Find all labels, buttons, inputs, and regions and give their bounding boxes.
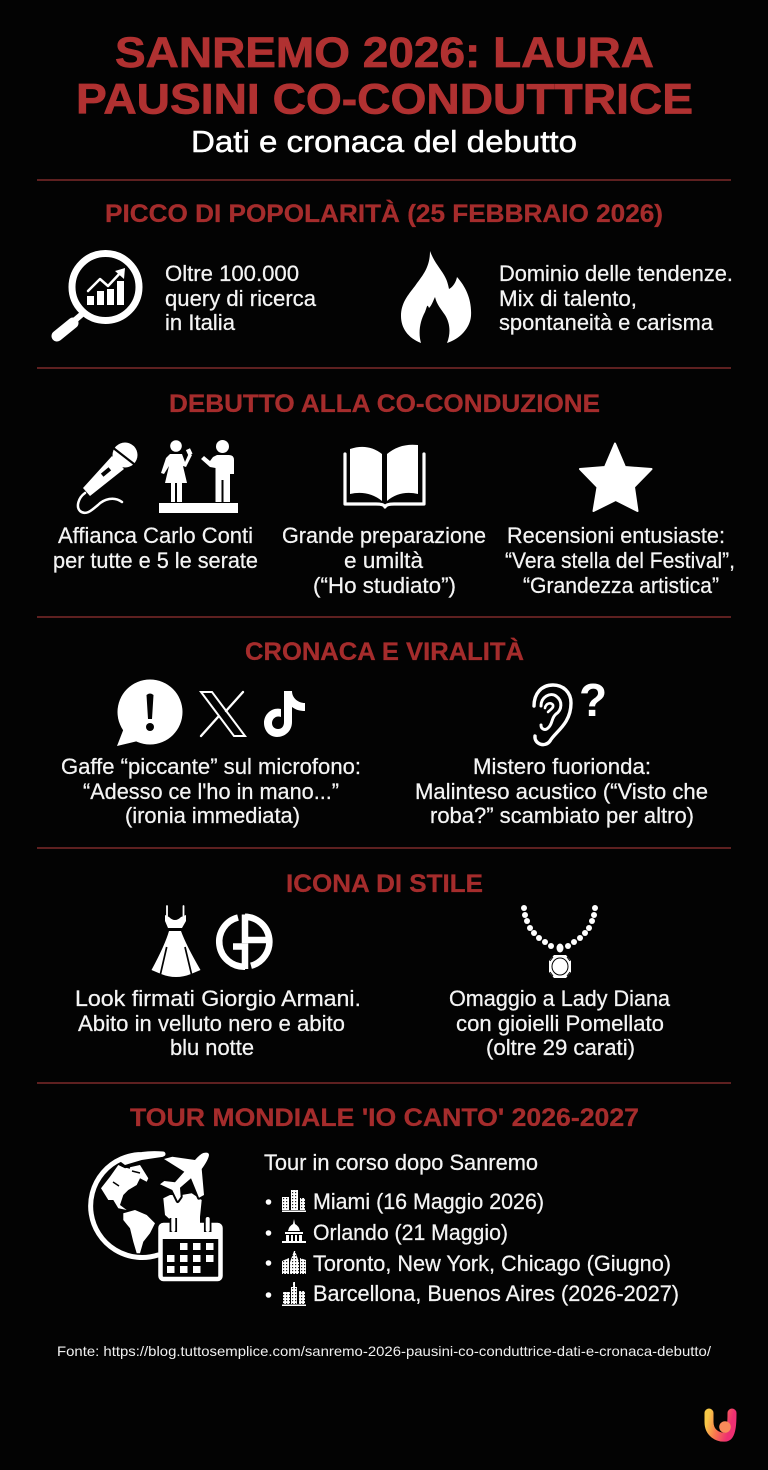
- icon: pearl necklace with pendant: [521, 905, 598, 978]
- text: dominio delle tendenze: [499, 261, 733, 335]
- item: orlando: Orlando (21 Maggio): [313, 1220, 508, 1245]
- icon: open book: [345, 445, 424, 507]
- title: SANREMO 2026: LAURA: [115, 30, 654, 77]
- item: barcellona, buenos aires: Barcellona, Buenos Aires (2026-2027): [313, 1281, 679, 1306]
- text: gaffe: Gaffe “piccante” sul microfono:: [61, 754, 361, 779]
- heading: cronaca: CRONACA E VIRALITÀ: [245, 637, 524, 666]
- list: tour dates: [266, 1189, 679, 1306]
- text: tour in corso: Tour in corso dopo Sanremo: [264, 1150, 538, 1175]
- text: dominio delle tendenze: spontaneità e carisma: [499, 310, 714, 335]
- heading: debutto: DEBUTTO ALLA CO-CONDUZIONE: [169, 390, 600, 418]
- icon: speech bubble with exclamation mark: [117, 680, 182, 746]
- icon: ear with question mark: ?: [579, 674, 607, 726]
- text: query di ricerca: Oltre 100.000: [165, 261, 299, 286]
- text: mistero fuorionda: [415, 754, 708, 828]
- text: mistero fuorionda: roba?” scambiato per altro): [430, 803, 694, 828]
- panel: tour mondiale: [91, 1104, 679, 1306]
- icon: microphone: [78, 442, 138, 513]
- icon: Giorgio Armani logo: [219, 914, 271, 969]
- text: gaffe: [61, 754, 361, 828]
- text: grande preparazione: Grande preparazione: [282, 523, 486, 548]
- icon: brand logo: [709, 1413, 732, 1437]
- text: look armani: Look firmati Giorgio Armani.: [75, 986, 361, 1011]
- icon: X logo: [201, 692, 245, 736]
- icon: flame: [401, 251, 471, 343]
- icon: star: [580, 444, 652, 511]
- text: query di ricerca: query di ricerca: [165, 286, 317, 311]
- text: recensioni: Recensioni entusiaste:: [507, 523, 725, 548]
- text: grande preparazione: (“Ho studiato”): [313, 573, 456, 598]
- icon: dress: [152, 906, 200, 977]
- text: omaggio a lady diana: Omaggio a Lady Diana: [449, 986, 671, 1011]
- text: look armani: blu notte: [170, 1035, 254, 1060]
- text: mistero fuorionda: Mistero fuorionda:: [473, 754, 651, 779]
- item: miami: Miami (16 Maggio 2026): [313, 1189, 544, 1214]
- text: query di ricerca: [165, 261, 317, 335]
- icon: ear with question mark: [534, 674, 607, 745]
- text: omaggio a lady diana: con gioielli Pomellato: [456, 1011, 664, 1036]
- text: gaffe: (ironia immediata): [125, 803, 300, 828]
- subtitle: Dati e cronaca del debutto: [191, 124, 577, 159]
- text: recensioni: [505, 523, 735, 598]
- text: query di ricerca: in Italia: [165, 310, 236, 335]
- panel: cronaca e viralità: [61, 637, 708, 828]
- title: [76, 30, 693, 124]
- title: PAUSINI CO-CONDUTTRICE: [76, 76, 693, 124]
- text: look armani: [75, 986, 361, 1060]
- icon: two presenters on stage: [159, 440, 238, 513]
- item: toronto, new york, chicago: Toronto, New York, Chicago (Giugno): [313, 1251, 671, 1276]
- icon: globe, plane and calendar: [91, 1152, 221, 1279]
- text: recensioni: “Grandezza artistica”: [523, 573, 719, 598]
- heading: picco di popolarità: PICCO DI POPOLARITÀ (25 FEBBRAIO 2026): [105, 199, 663, 228]
- panel: icona di stile: [75, 870, 671, 1060]
- heading: tour: TOUR MONDIALE 'IO CANTO' 2026-2027: [130, 1104, 639, 1132]
- text: affianca carlo conti: [53, 523, 258, 573]
- text: omaggio a lady diana: (oltre 29 carati): [486, 1035, 635, 1060]
- text: look armani: Abito in velluto nero e abito: [78, 1011, 345, 1036]
- text: dominio delle tendenze: Mix di talento,: [499, 286, 637, 311]
- text: mistero fuorionda: Malinteso acustico (“Visto che: [415, 779, 708, 804]
- panel: debutto alla co-conduzione: [53, 390, 735, 598]
- text: dominio delle tendenze: Dominio delle tendenze.: [499, 261, 733, 286]
- icon: TikTok logo: [264, 691, 305, 737]
- icon: magnifying glass with chart: [57, 254, 139, 336]
- source line: Fonte: https://blog.tuttosemplice.com/sanremo-2026-pausini-co-conduttrice-dati-e-cronaca-debutto/: [57, 1343, 711, 1359]
- text: omaggio a lady diana: [449, 986, 671, 1060]
- text: affianca carlo conti: per tutte e 5 le serate: [53, 548, 258, 573]
- text: affianca carlo conti: Affianca Carlo Conti: [58, 523, 253, 548]
- panel: picco di popolarità: [57, 199, 733, 343]
- text: grande preparazione: [282, 523, 486, 598]
- text: gaffe: “Adesso ce l'ho in mano...”: [83, 779, 339, 804]
- text: grande preparazione: e umiltà: [344, 548, 424, 573]
- heading: icona di stile: ICONA DI STILE: [286, 870, 483, 898]
- text: recensioni: “Vera stella del Festival”,: [505, 548, 735, 573]
